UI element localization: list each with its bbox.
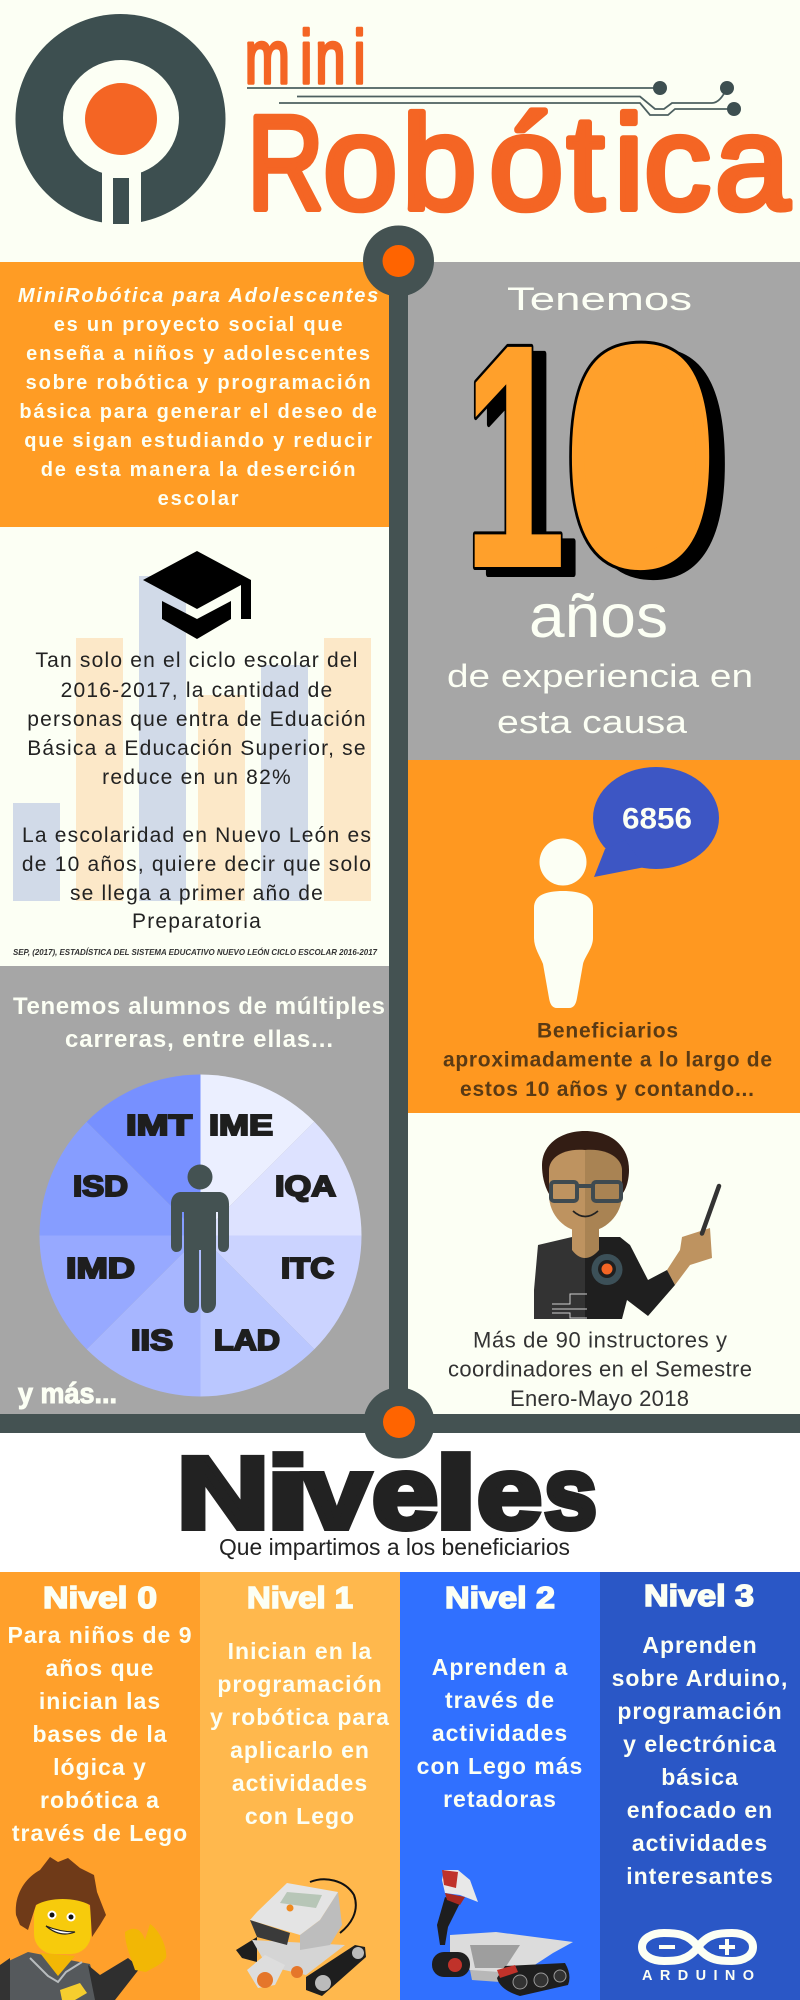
text: school statistics: se llega a primer año de — [70, 882, 324, 905]
text: nivel 3: interesantes — [626, 1863, 774, 1889]
panel: intro — [0, 262, 390, 527]
text: nivel 2: actividades — [432, 1720, 568, 1746]
text: nivel 2: Aprenden a — [432, 1654, 568, 1680]
text: school statistics: personas que entra de Eduación — [27, 708, 367, 731]
panel: 10 años — [408, 262, 800, 760]
text: nivel 1: con Lego — [245, 1803, 355, 1829]
text: nivel 3: Aprenden — [642, 1632, 758, 1658]
intro text: de esta manera la deserción — [41, 459, 357, 481]
big number 10: 1 — [463, 277, 566, 635]
heading: careers: carreras, entre ellas... — [65, 1026, 333, 1053]
logo icon — [16, 14, 226, 226]
text: nivel 3 — [612, 1632, 788, 1889]
text: nivel 3: y electrónica — [623, 1731, 777, 1757]
text: school statistics: La escolaridad en Nuevo León es — [22, 824, 372, 847]
pie labels: IQA — [275, 1171, 336, 1203]
speech bubble — [593, 767, 719, 877]
text: nivel 2: retadoras — [443, 1786, 557, 1812]
intro text: escolar — [158, 488, 240, 510]
text: nivel 1: programación — [217, 1671, 383, 1697]
intro text — [18, 285, 380, 510]
text: de experiencia en esta causa — [447, 658, 753, 740]
heading: Niveles: s — [544, 1436, 597, 1550]
text: nivel 2: través de — [445, 1687, 555, 1713]
text: nivel 1: y robótica para — [210, 1704, 390, 1730]
text: nivel 3: sobre Arduino, — [612, 1665, 788, 1691]
heading: careers — [13, 993, 385, 1053]
pie labels: IMD — [66, 1253, 135, 1285]
text: nivel 0: robótica a — [40, 1787, 160, 1813]
panel: nivel 1 — [200, 1572, 400, 2000]
number: 6856 — [622, 802, 692, 836]
panel: niveles header — [177, 1436, 597, 1560]
panel: instructors — [408, 1113, 800, 1414]
text: años: años — [529, 582, 668, 650]
bar chart background — [13, 576, 371, 901]
text: school statistics: Tan solo en el ciclo escolar del — [35, 649, 359, 672]
text: nivel 3: enfocado en — [627, 1797, 773, 1823]
panel: statistics — [0, 527, 390, 966]
text: nivel 1 — [210, 1638, 390, 1829]
citation: SEP, (2017), ESTADÍSTICA DEL SISTEMA EDUCATIVO NUEVO LEÓN CICLO ESCOLAR 2016-2017 — [13, 946, 377, 957]
text: school statistics: Preparatoria — [132, 910, 262, 933]
text: beneficiaries — [443, 1020, 772, 1101]
text: school statistics: 2016-2017, la cantidad de — [61, 679, 333, 702]
text: nivel 1: actividades — [232, 1770, 368, 1796]
illustration: lego robot — [236, 1879, 366, 1996]
text: school statistics: Básica a Educación Superior, se — [27, 737, 367, 760]
intro text: enseña a niños y adolescentes — [26, 343, 372, 365]
heading: Niveles: e — [477, 1436, 542, 1550]
text: nivel 0 — [7, 1622, 193, 1846]
text: beneficiaries: estos 10 años y contando... — [460, 1078, 754, 1101]
text: beneficiaries: Beneficiarios — [537, 1020, 678, 1042]
panel: nivel 0 — [0, 1572, 200, 2000]
text: de experiencia en esta causa: de experiencia en — [447, 658, 753, 694]
panel: beneficiaries — [408, 760, 800, 1113]
text: nivel 3: programación — [617, 1698, 783, 1724]
heading: careers: Tenemos alumnos de múltiples — [13, 993, 385, 1020]
intro text: sobre robótica y programación — [26, 372, 372, 394]
heading: nivel 0: Nivel 0 — [43, 1580, 157, 1615]
text: nivel 2 — [417, 1654, 583, 1812]
title: Robótica: R — [247, 89, 324, 238]
pie labels: ITC — [281, 1253, 334, 1285]
bottom node — [364, 1388, 434, 1458]
text: instructors: coordinadores en el Semestre — [448, 1356, 752, 1382]
panel: nivel 2 — [400, 1572, 600, 2000]
text: nivel 0: bases de la — [32, 1721, 168, 1747]
pie labels: IME — [209, 1110, 273, 1142]
logo: Arduino: ARDUINO — [642, 1968, 754, 1984]
text: nivel 0: Para niños de 9 — [7, 1622, 193, 1648]
text: nivel 1: Inician en la — [228, 1638, 372, 1664]
text: school statistics: de 10 años, quiere decir que solo — [22, 853, 372, 876]
text: instructors — [448, 1328, 752, 1411]
pie labels: LAD — [214, 1325, 280, 1357]
heading: Niveles: e — [372, 1436, 438, 1550]
heading: nivel 2: Nivel 2 — [445, 1580, 555, 1615]
intro text: básica para generar el deseo de — [19, 401, 379, 423]
text: nivel 3: básica — [661, 1764, 739, 1790]
title: Robótica: obótica — [323, 89, 790, 238]
heading: Niveles: i — [266, 1436, 310, 1550]
heading: nivel 3: Nivel 3 — [644, 1578, 754, 1613]
heading: Niveles: N — [177, 1436, 269, 1550]
text: nivel 0: través de Lego — [12, 1820, 188, 1846]
intro text: es un proyecto social que — [54, 314, 344, 336]
intro text: que sigan estudiando y reducir — [24, 430, 374, 452]
illustration: instructor — [534, 1131, 719, 1319]
logo: Arduino — [642, 1933, 754, 1984]
text: school statistics: reduce en un 82% — [102, 766, 292, 789]
illustration: EV3 robot — [432, 1870, 573, 1996]
timeline connector — [0, 226, 800, 1458]
pie labels: ISD — [73, 1171, 128, 1203]
text: nivel 0: años que — [46, 1655, 154, 1681]
pie labels: IIS — [131, 1325, 173, 1357]
text: nivel 0: inician las — [39, 1688, 161, 1714]
circuit lines — [247, 81, 741, 116]
text: school statistics — [22, 649, 372, 933]
panel: niveles background — [0, 1433, 800, 1572]
intro text: MiniRobótica para Adolescentes — [18, 285, 380, 307]
icon: graduation cap — [143, 551, 251, 639]
top node — [363, 226, 434, 296]
title: mini: mini — [245, 15, 366, 99]
heading: Tenemos: Tenemos — [507, 281, 692, 317]
text: nivel 3: actividades — [632, 1830, 768, 1856]
pie chart — [40, 1074, 362, 1396]
heading: Niveles: l — [435, 1436, 477, 1550]
subheading: Que impartimos a los beneficiarios — [219, 1534, 570, 1560]
illustration: lego figure — [0, 1857, 166, 2000]
pie labels: IMT — [126, 1110, 192, 1142]
panel: careers — [0, 966, 390, 1414]
icon: person — [171, 1164, 229, 1313]
text: beneficiaries: aproximadamente a lo largo de — [443, 1048, 772, 1072]
heading: nivel 1: Nivel 1 — [247, 1580, 353, 1615]
big number 10 — [463, 277, 721, 635]
text: instructors: Enero-Mayo 2018 — [510, 1386, 689, 1411]
text: nivel 0: lógica y — [53, 1754, 147, 1780]
panel: nivel 3 — [600, 1572, 800, 2000]
text: instructors: Más de 90 instructores y — [473, 1328, 727, 1352]
pie labels — [66, 1110, 336, 1357]
text: nivel 1: aplicarlo en — [230, 1737, 370, 1763]
heading: Niveles: v — [304, 1436, 370, 1550]
icon: person silhouette — [534, 838, 593, 1008]
big number 10: 0 — [560, 277, 721, 635]
text: nivel 2: con Lego más — [417, 1753, 583, 1779]
text: y más: y más... — [18, 1378, 117, 1410]
text: de experiencia en esta causa: esta causa — [497, 704, 687, 740]
